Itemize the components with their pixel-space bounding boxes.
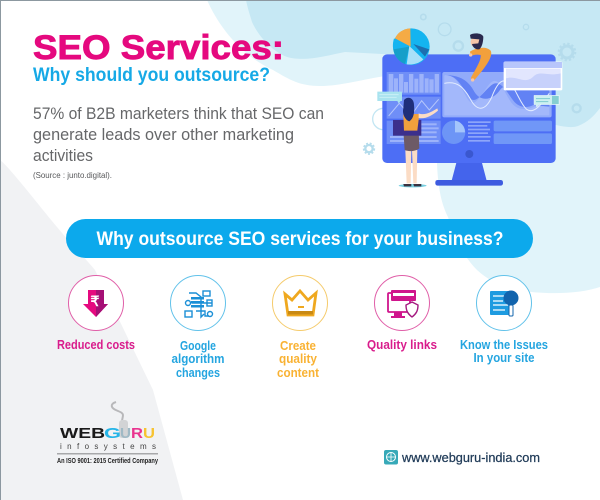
item: quality links: [367, 276, 437, 352]
speech bubble right: [534, 95, 559, 107]
icon: globe: [384, 450, 398, 464]
logo: webguru infosystems: WEB: [60, 425, 105, 442]
banner: [66, 219, 533, 258]
background: light blue blob: [207, 0, 600, 293]
logo: webguru infosystems: U: [120, 425, 131, 442]
item: google algorithm changes: [170, 276, 226, 380]
floating chart card: [504, 62, 562, 90]
logo: webguru infosystems: An ISO 9001: 2015 Certified Company: [57, 458, 158, 465]
item: know the issues in your site: In your site: [474, 351, 535, 365]
statistic text: activities: [33, 146, 93, 165]
logo: webguru infosystems: R: [131, 425, 143, 442]
floating pie chart: [393, 28, 430, 65]
logo: webguru infosystems: G: [104, 425, 121, 442]
small pie panel: [442, 121, 465, 144]
decorative gears and rings: [364, 14, 581, 154]
illustration: analytics monitor with two people: [364, 14, 581, 187]
item: create quality content: quality: [279, 352, 317, 366]
website link: www.webguru-india.com: [401, 450, 540, 465]
logo: webguru infosystems: infosystems: [60, 442, 156, 451]
icon: rupee down arrow: ₹: [91, 293, 100, 309]
line chart panel: [387, 97, 441, 119]
item: know the issues in your site: [460, 276, 548, 365]
table panel: [387, 121, 441, 144]
item: google algorithm changes: Google: [180, 339, 216, 353]
icon: document with magnifier: [476, 276, 532, 330]
background: dark blue blob: [246, 0, 600, 127]
wave chart panel: [442, 72, 552, 117]
bar chart panel: [387, 72, 441, 95]
text lines and summary bars: [468, 121, 552, 144]
icon: monitor with shield: [374, 276, 430, 330]
item: google algorithm changes: algorithm: [172, 352, 224, 366]
source note: (Source : junto.digital).: [33, 171, 112, 180]
icon: algorithm flow: [170, 276, 226, 330]
woman with folder pointing at screen: [393, 98, 438, 187]
item: quality links: Quality links: [367, 338, 437, 352]
logo: webguru infosystems: U: [143, 425, 155, 442]
statistic text: [33, 104, 324, 165]
item: google algorithm changes: changes: [176, 366, 220, 380]
subtitle: Why should you outsource?: [33, 64, 270, 86]
banner: Why outsource SEO services for your business?: [96, 228, 504, 250]
man leaning over monitor: [469, 33, 491, 82]
background: grey shape bottom left: [0, 160, 183, 500]
item: create quality content: [272, 276, 328, 380]
statistic text: generate leads over other marketing: [33, 125, 294, 144]
icon: crown: [272, 276, 328, 330]
logo: webguru infosystems: [57, 402, 158, 465]
item: create quality content: Create: [280, 339, 316, 353]
title: SEO Services:: [33, 29, 284, 67]
item: create quality content: content: [277, 366, 320, 380]
item: know the issues in your site: Know the Issues: [460, 338, 548, 352]
item: reduced costs: [57, 276, 135, 352]
monitor stand: [452, 162, 487, 181]
item: reduced costs: Reduced costs: [57, 338, 135, 352]
speech bubble left: [377, 92, 402, 103]
logo mouse cable: [112, 402, 123, 422]
statistic text: 57% of B2B marketers think that SEO can: [33, 104, 324, 123]
monitor body: [382, 54, 556, 163]
